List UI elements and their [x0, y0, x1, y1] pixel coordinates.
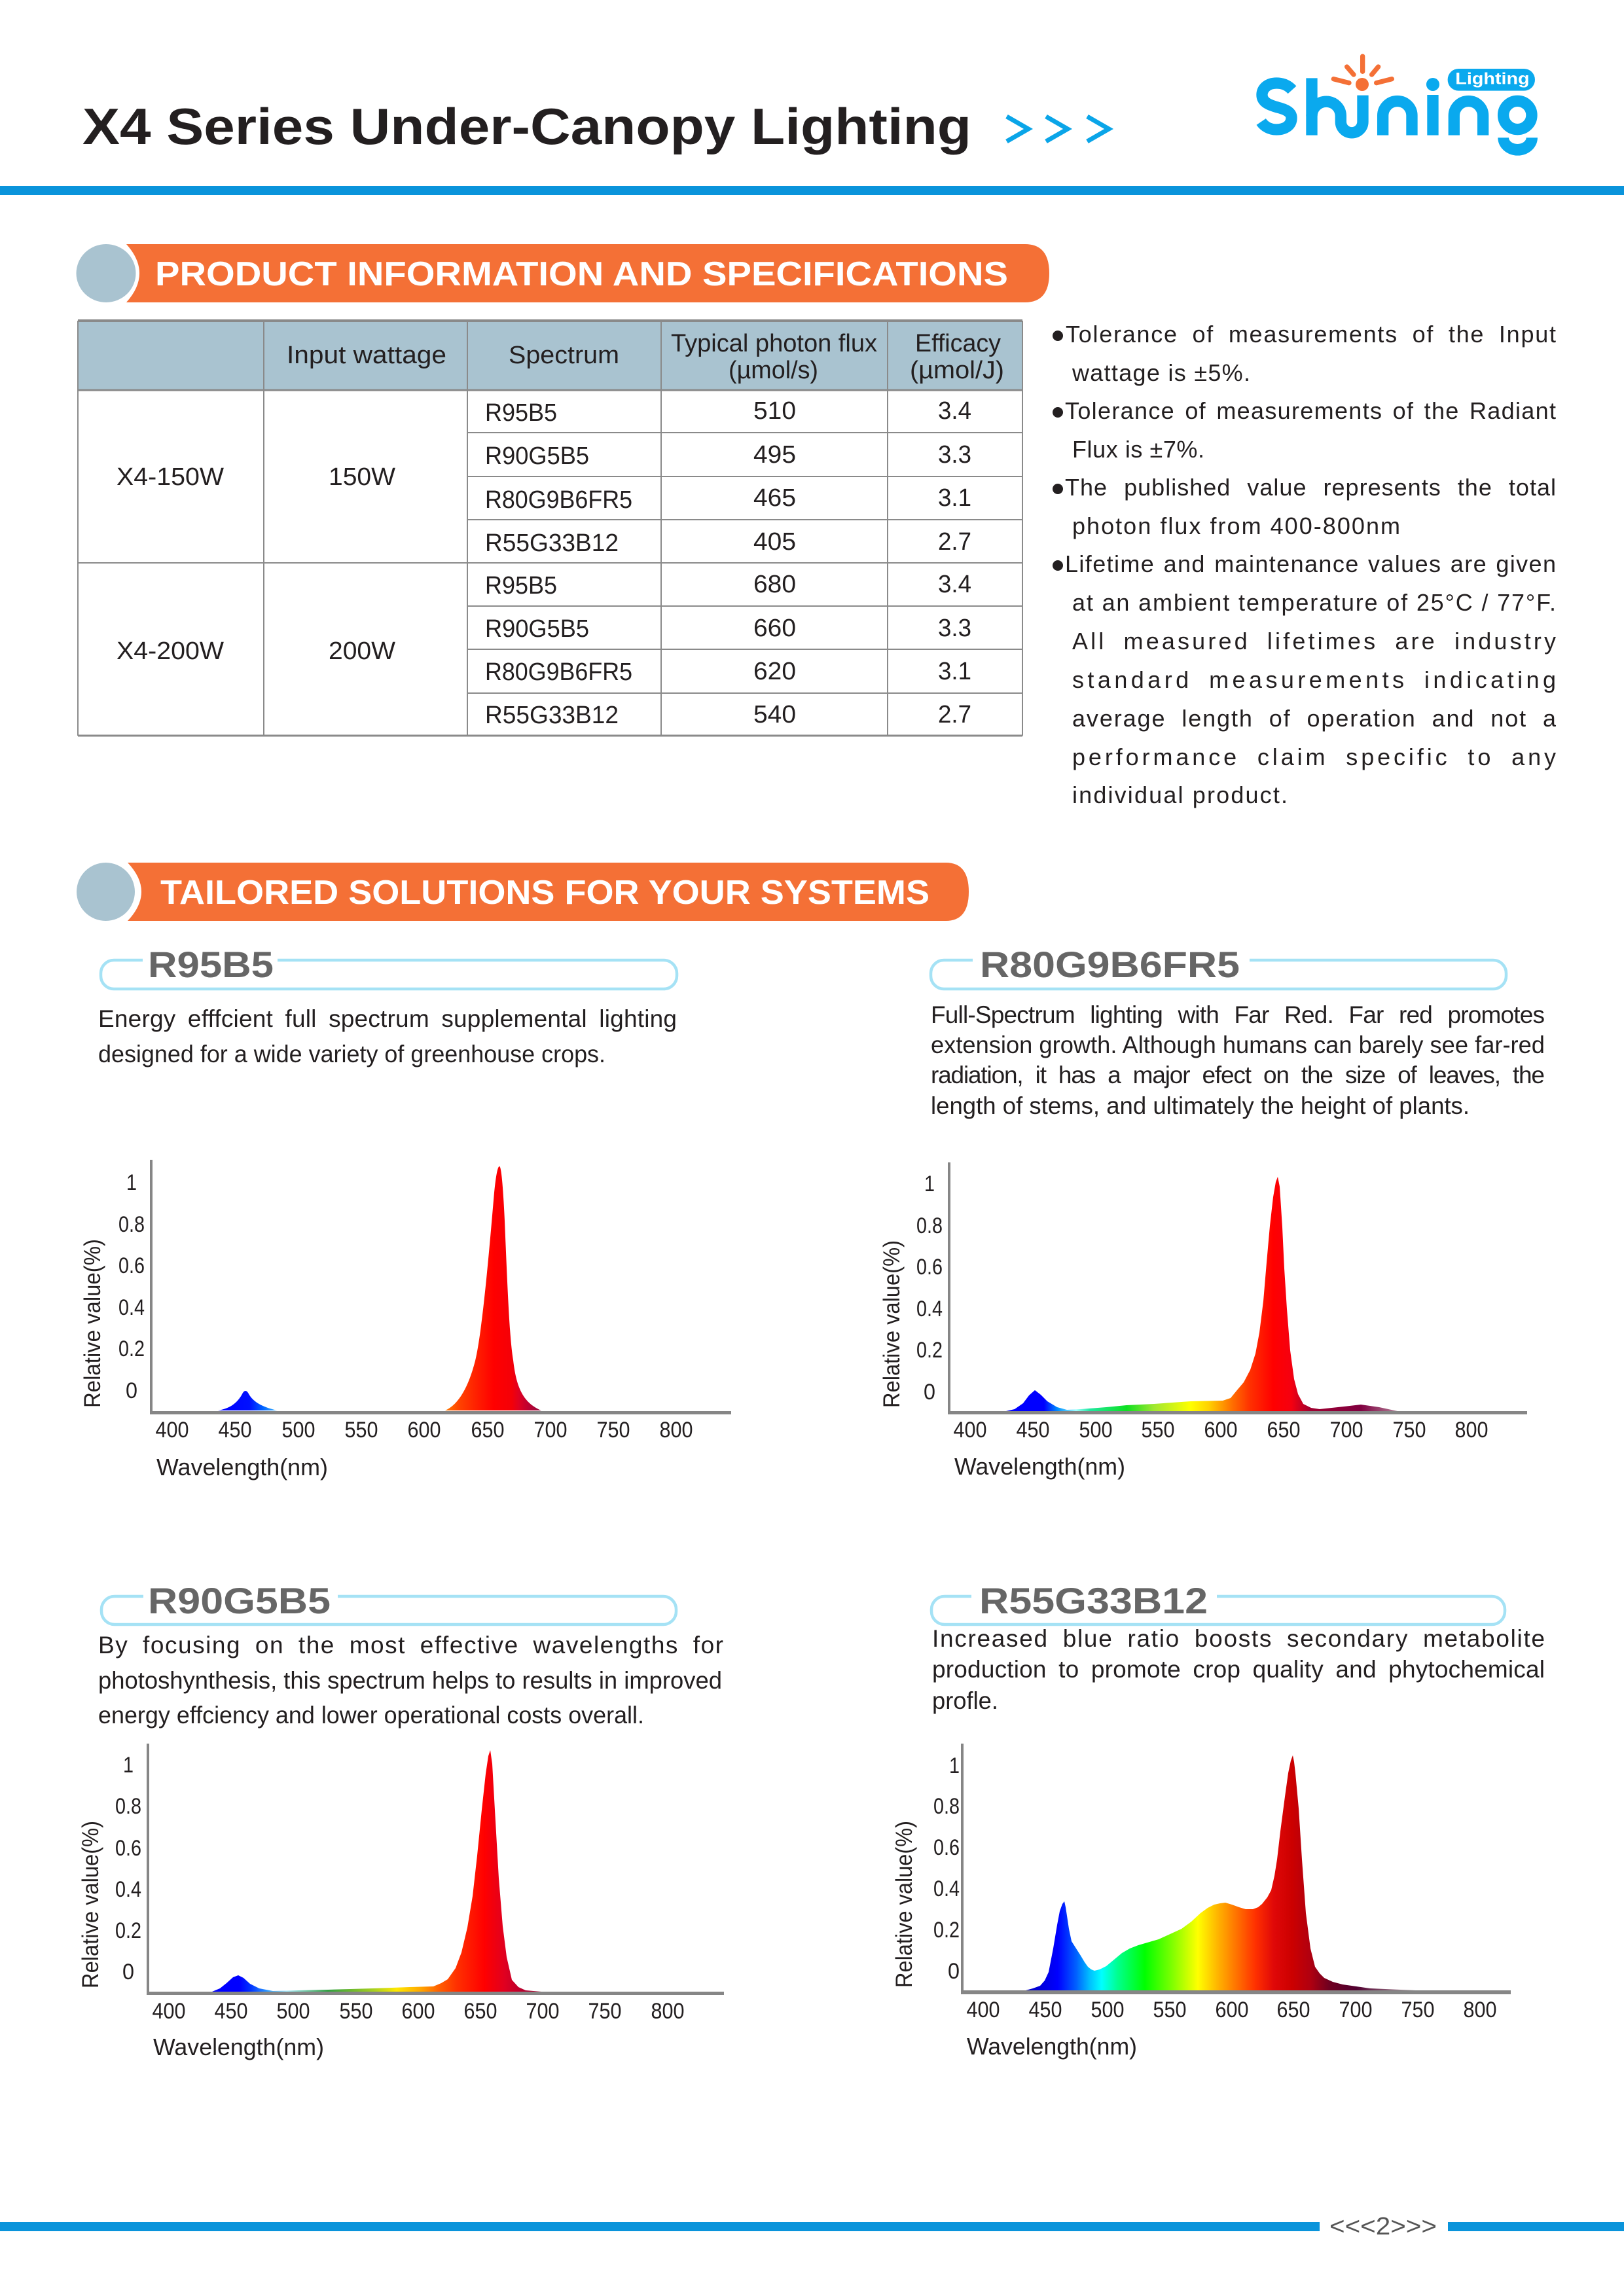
y axis labels: 0.2: [916, 1338, 943, 1363]
specifications table: X4-200W: [117, 637, 224, 665]
x axis labels: 400: [966, 1998, 1000, 2022]
notes list: average length of operation and not a: [1072, 705, 1557, 732]
x axis labels: 800: [660, 1418, 693, 1443]
x axis labels: 500: [1079, 1418, 1113, 1443]
specifications table: Typical photon flux: [671, 330, 877, 357]
y axis title: Relative value(%): [892, 1821, 917, 1988]
text: R95B5 description: [98, 1005, 677, 1067]
notes list: Lifetime and maintenance values are given: [1065, 550, 1556, 577]
y axis labels: 0: [126, 1378, 137, 1403]
x axis labels: 500: [281, 1418, 316, 1443]
x axis labels: 650: [1267, 1418, 1300, 1443]
notes list: individual product.: [1072, 781, 1288, 808]
notes list: Tolerance of measurements of the Radiant: [1065, 397, 1556, 424]
specifications table: 2.7: [938, 701, 971, 728]
text: R95B5 description: designed for a wide variety of greenhouse crops.: [98, 1041, 605, 1067]
y axis title: Relative value(%): [78, 1821, 103, 1988]
y axis labels: 0.2: [933, 1918, 960, 1943]
x axis title: Wavelength(nm): [153, 2034, 324, 2060]
notes list: wattage is ±5%.: [1072, 359, 1250, 386]
specifications table: R95B5: [485, 572, 557, 600]
x axis labels: 550: [1142, 1418, 1174, 1443]
x axis title: Wavelength(nm): [967, 2033, 1137, 2060]
specifications table: R80G9B6FR5: [485, 486, 632, 514]
specifications table: R95B5: [485, 399, 557, 427]
notes list: photon flux from 400-800nm: [1072, 512, 1400, 539]
specifications table: 2.7: [938, 528, 971, 556]
notes list: The published value represents the total: [1065, 474, 1556, 501]
x axis labels: 700: [1330, 1418, 1363, 1443]
y axis labels: 0.8: [916, 1213, 943, 1238]
specifications table: 495: [753, 441, 796, 469]
y axis labels: 0.2: [118, 1336, 145, 1361]
specifications table: 200W: [329, 637, 395, 665]
x axis labels: 800: [1464, 1998, 1496, 2022]
specifications table: 405: [753, 528, 796, 556]
y axis labels: 0.6: [916, 1255, 943, 1280]
specifications table: 660: [753, 615, 796, 642]
x axis labels: 400: [156, 1418, 189, 1443]
spectrum curve: [1026, 1755, 1416, 1990]
specifications table: (µmol/J): [910, 357, 1004, 384]
x axis labels: 750: [588, 1999, 622, 2024]
x axis labels: 800: [651, 1999, 685, 2024]
panel: R80G9B6FR5 heading: R80G9B6FR5: [980, 944, 1240, 985]
spectrum curve: [1006, 1177, 1398, 1411]
chart: R80G9B6FR5 spectrum: [879, 1162, 1527, 1480]
x axis labels: 550: [1153, 1998, 1186, 2022]
panel: R95B5 heading: [101, 944, 677, 989]
text: R55G33B12 description: profle.: [932, 1687, 998, 1714]
text: R90G5B5 description: energy effciency and lower operational costs overall.: [98, 1702, 644, 1729]
text: R80G9B6FR5 description: radiation, it has a major efect on the size of leaves, the: [931, 1062, 1545, 1088]
x axis labels: 400: [152, 1999, 186, 2024]
axes: [961, 1744, 1511, 1994]
y axis labels: [115, 1753, 141, 1984]
panel: R55G33B12 heading: R55G33B12: [979, 1580, 1208, 1621]
notes list: standard measurements indicating: [1072, 666, 1556, 693]
x axis labels: 500: [1091, 1998, 1125, 2022]
x axis labels: [156, 1418, 693, 1443]
x axis labels: 700: [534, 1418, 567, 1443]
panel: R90G5B5 heading: [101, 1580, 676, 1624]
y axis labels: 0.6: [933, 1835, 960, 1860]
x axis labels: 800: [1454, 1418, 1489, 1443]
specifications table: 150W: [329, 463, 395, 491]
section heading: product information: [76, 244, 1049, 302]
x axis labels: 450: [1016, 1418, 1050, 1443]
specifications table: Efficacy: [915, 330, 1001, 357]
y axis labels: 1: [126, 1170, 137, 1195]
specifications table: 3.3: [938, 615, 971, 642]
panel: R80G9B6FR5 heading: [931, 944, 1506, 989]
text: R80G9B6FR5 description: extension growth. Although humans can barely see far-red: [931, 1031, 1545, 1058]
x axis labels: 400: [953, 1418, 987, 1443]
text: R95B5 description: Energy efffcient full spectrum supplemental lighting: [98, 1005, 677, 1032]
y axis labels: 1: [949, 1753, 960, 1778]
y axis labels: 0.6: [118, 1253, 145, 1278]
text: R80G9B6FR5 description: length of stems, and ultimately the height of plants.: [931, 1092, 1470, 1119]
specifications table: 3.3: [938, 441, 971, 469]
footer with page number: [0, 2213, 1624, 2240]
x axis labels: 650: [471, 1418, 504, 1443]
x axis labels: 650: [1276, 1998, 1310, 2022]
spectrum curve: [212, 1750, 541, 1992]
specifications table: [78, 321, 1022, 736]
specifications table: R55G33B12: [485, 702, 619, 729]
text: R80G9B6FR5 description: Full-Spectrum lighting with Far Red. Far red promotes: [931, 1001, 1545, 1028]
chart: R55G33B12 spectrum: [892, 1744, 1511, 2060]
specifications table: 465: [753, 484, 796, 512]
specifications table: 3.1: [938, 484, 971, 512]
specifications table: Spectrum: [509, 342, 619, 369]
specifications table: R55G33B12: [485, 529, 619, 557]
x axis labels: 600: [402, 1999, 435, 2024]
logo: Shining Lighting: Lighting: [1455, 70, 1530, 88]
y axis labels: [933, 1753, 960, 1984]
panel: R90G5B5 heading: R90G5B5: [148, 1580, 331, 1621]
x axis labels: 450: [219, 1418, 251, 1443]
notes list: at an ambient temperature of 25°C / 77°F.: [1072, 589, 1556, 616]
y axis labels: 0.4: [115, 1877, 141, 1902]
text: R55G33B12 description: Increased blue ratio boosts secondary metabolite: [932, 1625, 1545, 1652]
y axis labels: 0: [122, 1960, 134, 1984]
y axis labels: [118, 1170, 145, 1403]
specifications table: 3.4: [938, 397, 971, 425]
x axis title: Wavelength(nm): [156, 1454, 328, 1480]
specifications table: 3.4: [938, 571, 971, 598]
x axis labels: 450: [215, 1999, 247, 2024]
axes: [150, 1160, 731, 1414]
specifications table: Input wattage: [287, 342, 446, 369]
x axis title: Wavelength(nm): [954, 1453, 1125, 1480]
chart: R95B5 spectrum: [80, 1160, 731, 1480]
specifications table: 540: [753, 701, 796, 728]
section heading: product information: PRODUCT INFORMATION AND SPECIFICATIONS: [155, 255, 1008, 293]
y axis labels: [916, 1172, 943, 1405]
specifications table: (µmol/s): [729, 357, 818, 384]
text: R55G33B12 description: production to promote crop quality and phytochemical: [932, 1656, 1545, 1683]
x axis labels: 750: [1401, 1998, 1435, 2022]
specifications table: 680: [753, 571, 796, 598]
specifications table: 3.1: [938, 658, 971, 685]
x axis labels: 600: [1215, 1998, 1249, 2022]
y axis labels: 0.8: [118, 1212, 145, 1237]
x axis labels: 700: [526, 1999, 559, 2024]
specifications table: R90G5B5: [485, 615, 589, 643]
text: R90G5B5 description: [98, 1632, 723, 1729]
y axis labels: 0.6: [115, 1836, 141, 1861]
text: R80G9B6FR5 description: [931, 1001, 1545, 1119]
notes list: [1053, 321, 1557, 808]
y axis labels: 0.8: [933, 1794, 960, 1819]
notes list: Flux is ±7%.: [1072, 436, 1204, 463]
spectrum curve: [218, 1166, 541, 1410]
axes: [147, 1744, 724, 1995]
notes list: performance claim specific to any: [1072, 744, 1556, 770]
panel: R95B5 heading: R95B5: [148, 944, 274, 985]
y axis labels: 0.8: [115, 1794, 141, 1819]
y axis title: Relative value(%): [80, 1239, 105, 1408]
specifications table: R90G5B5: [485, 442, 589, 470]
x axis labels: [966, 1998, 1496, 2022]
text: R55G33B12 description: [932, 1625, 1545, 1714]
specifications table: 510: [753, 397, 796, 425]
y axis labels: 1: [924, 1172, 935, 1196]
section heading: tailored solutions: [77, 863, 969, 921]
logo: Shining Lighting: [1261, 56, 1538, 156]
x axis labels: 450: [1029, 1998, 1062, 2022]
x axis labels: 550: [344, 1418, 378, 1443]
x axis labels: 500: [276, 1999, 310, 2024]
x axis labels: [953, 1418, 1489, 1443]
y axis title: Relative value(%): [879, 1240, 905, 1408]
x axis labels: 650: [463, 1999, 497, 2024]
panel: R55G33B12 heading: [931, 1580, 1505, 1624]
y axis labels: 0.4: [933, 1876, 960, 1901]
section heading: tailored solutions: TAILORED SOLUTIONS FOR YOUR SYSTEMS: [160, 874, 929, 912]
x axis labels: 600: [407, 1418, 441, 1443]
x axis labels: 600: [1204, 1418, 1237, 1443]
notes list: All measured lifetimes are industry: [1072, 628, 1556, 655]
chart: R90G5B5 spectrum: [78, 1744, 724, 2060]
y axis labels: 0.4: [916, 1297, 943, 1321]
y axis labels: 1: [123, 1753, 134, 1778]
footer with page number: <<<2>>>: [1329, 2213, 1437, 2240]
y axis labels: 0: [924, 1380, 935, 1405]
x axis labels: 750: [597, 1418, 630, 1443]
specifications table: X4-150W: [117, 463, 224, 491]
title: X4 Series Under-Canopy Lighting: [82, 98, 971, 155]
text: R90G5B5 description: By focusing on the most effective wavelengths for: [98, 1632, 723, 1659]
y axis labels: 0: [948, 1959, 960, 1984]
text: R90G5B5 description: photoshynthesis, this spectrum helps to results in improved: [98, 1667, 722, 1694]
icon: header chevrons: [1007, 117, 1109, 141]
x axis labels: [152, 1999, 685, 2024]
x axis labels: 700: [1339, 1998, 1372, 2022]
x axis labels: 750: [1393, 1418, 1426, 1443]
header rule: [0, 186, 1624, 195]
y axis labels: 0.4: [118, 1295, 145, 1320]
axes: [948, 1162, 1527, 1414]
y axis labels: 0.2: [115, 1918, 141, 1943]
notes list: Tolerance of measurements of the Input: [1066, 321, 1556, 348]
specifications table: 620: [753, 658, 796, 685]
specifications table: R80G9B6FR5: [485, 658, 632, 686]
x axis labels: 550: [339, 1999, 373, 2024]
